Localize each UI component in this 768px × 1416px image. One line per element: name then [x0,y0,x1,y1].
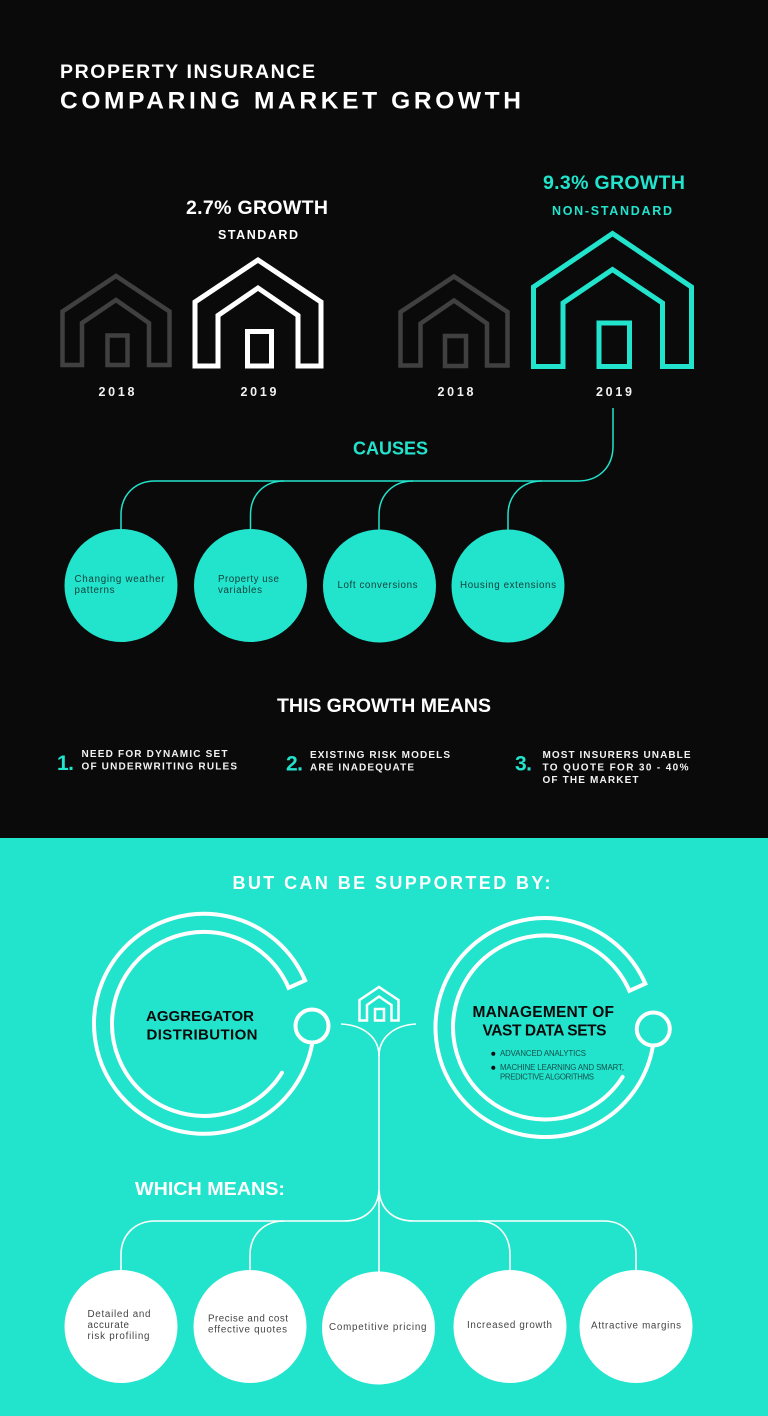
list item 3: TO QUOTE FOR 30 - 40% [542,762,689,774]
circle: property use variables: Property use [218,574,280,585]
circle: detailed and accurate risk profiling: risk profiling [88,1331,150,1342]
icon: house 2018 non-standard [400,276,508,366]
circle: competitive pricing: Competitive pricing [329,1322,426,1333]
icon: house 2019 non-standard [534,234,692,366]
ring: aggregator distribution [94,914,328,1134]
ring: aggregator distribution: DISTRIBUTION [146,1026,258,1044]
list item 1: 1. [57,752,74,775]
ring: management of vast data sets: VAST DATA SETS [482,1022,606,1040]
heading: which means: WHICH MEANS: [135,1178,285,1199]
heading: non-standard growth [543,172,685,218]
label: 2018 non-standard: 2018 [438,385,474,399]
list item 3 [515,750,691,786]
circle: property use variables: variables [218,585,262,596]
list item 1: OF UNDERWRITING RULES [82,762,237,772]
circle: precise and cost effective quotes: effective quotes [208,1324,287,1336]
circle: changing weather patterns: Changing weather [74,574,165,585]
circle: loft conversions: Loft conversions [338,580,418,591]
circle: attractive margins [580,1270,692,1383]
ring: management of vast data sets: ADVANCED ANALYTICS [500,1049,586,1058]
panel: support (teal) [0,838,768,1416]
circle: housing extensions [452,530,564,642]
circle: increased growth: Increased growth [467,1320,552,1331]
list item 1 [57,749,237,775]
circle: detailed and accurate risk profiling: Detailed and [88,1309,150,1320]
label: 2019 standard: 2019 [240,385,277,399]
circle: housing extensions: Housing extensions [460,580,556,591]
heading: this growth means: THIS GROWTH MEANS [277,695,491,717]
circle: competitive pricing [322,1272,435,1384]
ring: aggregator distribution: AGGREGATOR [146,1008,254,1025]
circle: precise and cost effective quotes [194,1270,306,1383]
title: PROPERTY INSURANCE [60,61,315,83]
panel: market growth (dark) [0,0,768,838]
icon: small house [360,987,398,1020]
title [60,61,521,114]
list item 2 [286,750,450,776]
connector: trunk and branches [121,1024,636,1272]
list item 2: 2. [286,752,303,776]
heading: standard growth: STANDARD [218,228,298,242]
circle: property use variables [194,529,307,642]
list item 3: OF THE MARKET [542,775,638,786]
circle: changing weather patterns: patterns [74,585,115,596]
list item 1: NEED FOR DYNAMIC SET [82,749,228,760]
circle: increased growth [454,1270,566,1383]
ring: management of vast data sets: MANAGEMENT OF [472,1004,614,1021]
ring: management of vast data sets: PREDICTIVE ALGORITHMS [500,1072,594,1082]
label: 2018 standard: 2018 [98,385,135,399]
heading: non-standard growth: NON-STANDARD [552,204,672,218]
list item 2: ARE INADEQUATE [310,762,414,774]
title: COMPARING MARKET GROWTH [60,88,521,114]
heading: standard growth [186,197,328,242]
label: 2019 non-standard: 2019 [596,385,632,399]
list item 2: EXISTING RISK MODELS [310,750,450,761]
list item 3: 3. [515,752,532,776]
icon: house 2019 standard [195,260,321,366]
heading: causes: CAUSES [353,438,428,458]
heading: standard growth: 2.7% GROWTH [186,197,328,219]
ring: management of vast data sets [435,918,670,1137]
circle: detailed and accurate risk profiling: accurate [88,1320,130,1331]
heading: non-standard growth: 9.3% GROWTH [543,172,685,194]
circle: detailed and accurate risk profiling [64,1270,178,1383]
list item 3: MOST INSURERS UNABLE [542,750,691,761]
circle: precise and cost effective quotes: Precise and cost [208,1314,288,1324]
circle: attractive margins: Attractive margins [591,1320,681,1332]
connector: causes tree [121,408,613,531]
heading: but can be supported by: BUT CAN BE SUPPORTED BY: [232,873,550,893]
circle: loft conversions [323,530,436,642]
icon: house 2018 standard [62,276,170,365]
circle: changing weather patterns [64,529,178,642]
ring: management of vast data sets: MACHINE LEARNING AND SMART, [500,1063,624,1072]
